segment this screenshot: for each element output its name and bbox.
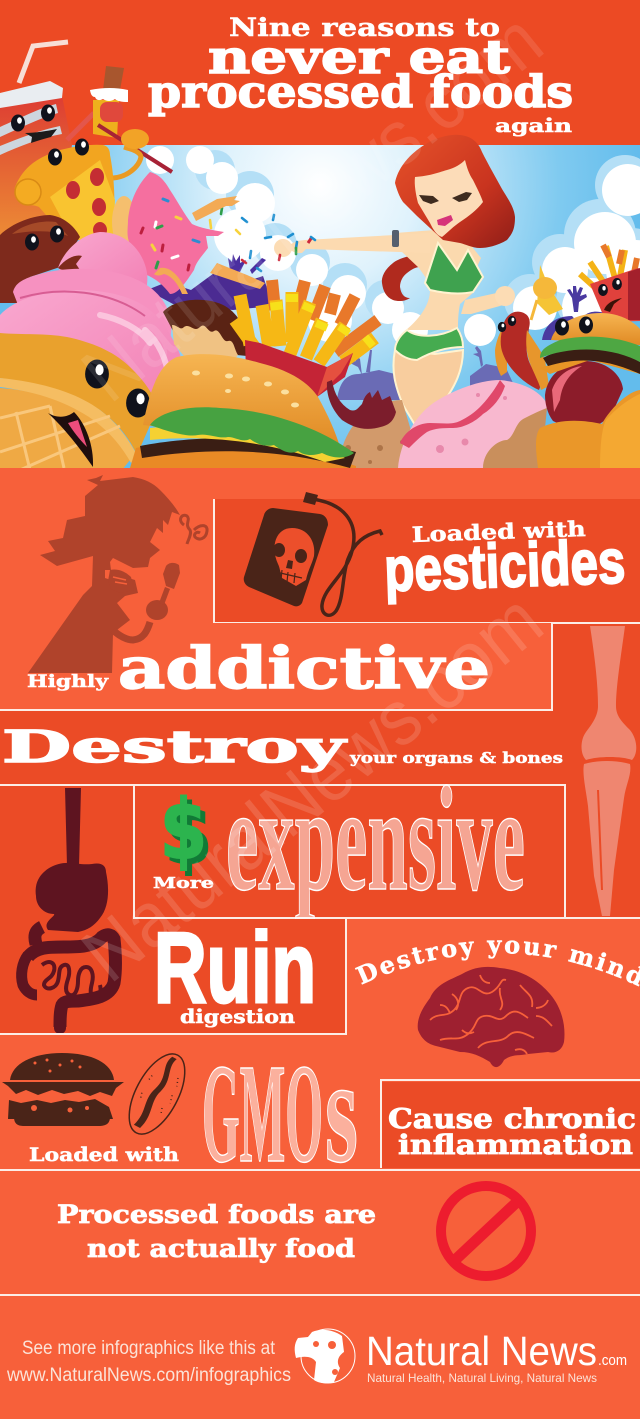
panel: pesticides (214, 492, 640, 623)
cup arm (67, 113, 94, 140)
text: cause chronic: Cause chronic (388, 1104, 636, 1135)
right side food (536, 361, 640, 468)
text: tagline: Natural Health, Natural Living, Natural News (367, 1371, 597, 1385)
hair (395, 135, 515, 248)
title: line 2: never eat (208, 30, 511, 84)
mouth (48, 412, 93, 467)
drink body (0, 96, 72, 235)
left dark column (0, 786, 134, 920)
skull (274, 528, 314, 586)
panel: chronic inflammation (381, 1080, 640, 1168)
icon: hot dog (118, 1045, 196, 1143)
popsicle stick (103, 66, 124, 90)
text: loaded with: Loaded with (411, 516, 586, 547)
soft-serve ice cream character (0, 232, 185, 470)
burger (130, 354, 356, 468)
text: .com: .com (598, 1352, 627, 1369)
fork (159, 587, 170, 605)
outstretched arm (291, 235, 402, 253)
panel: loaded with GMOs (0, 1028, 640, 1194)
title: line 3: processed foods (148, 67, 573, 118)
text: loaded with: Loaded with (29, 1144, 179, 1166)
purple hand and blob (542, 286, 605, 340)
small intestine (42, 962, 101, 997)
text: infographics url: www.NaturalNews.com/infographics (6, 1365, 291, 1386)
text: natural news logo: Natural News (366, 1328, 597, 1374)
cheese (150, 426, 345, 462)
mouth teeth (113, 577, 127, 584)
shorts (395, 328, 463, 360)
red hand (100, 102, 123, 122)
bottom bun and patty (130, 441, 356, 468)
pink iced donut (398, 380, 547, 468)
stomach (36, 863, 108, 932)
lettuce (150, 407, 354, 458)
cone rim (0, 333, 158, 455)
swirl middle (13, 269, 171, 350)
mustard bottle and hand (531, 265, 563, 320)
hero illustration: woman running from junk food (0, 42, 640, 470)
panel: more expensive (0, 756, 640, 922)
hot dog character (495, 312, 549, 390)
chocolate donut (163, 300, 247, 360)
clouds (146, 146, 640, 348)
small burger character (540, 313, 640, 374)
icon: digestive tract (22, 788, 116, 1034)
swirl fold (20, 292, 145, 316)
distant crowd (337, 346, 520, 400)
popsicle body (93, 100, 119, 138)
woman (274, 135, 515, 430)
text: more: More (153, 874, 214, 892)
waist (406, 290, 474, 330)
panel: addictive (0, 475, 552, 710)
title banner (0, 0, 640, 146)
footer (6, 1328, 627, 1386)
watermark: NaturalNews.com (65, 576, 558, 998)
icon: woman eating silhouette (28, 475, 207, 673)
pink donut character (112, 172, 265, 294)
highlight (100, 315, 169, 380)
text: see more infographics: See more infographics like this at (22, 1338, 276, 1359)
right dark column (553, 623, 640, 919)
mouth (25, 129, 57, 143)
text: destroy: Destroy (2, 722, 348, 773)
steam (181, 515, 207, 544)
panel: loaded with GMOs: GMO (202, 1034, 323, 1192)
legs (393, 350, 463, 430)
text: processed foods are: Processed foods are (57, 1200, 376, 1229)
eyes (419, 192, 472, 204)
green top (425, 243, 483, 293)
text: highly: Highly (27, 672, 109, 692)
cup character (0, 42, 72, 235)
sprinkles on donut (141, 199, 199, 270)
text: addictive: addictive (118, 635, 490, 702)
cloud shadows (195, 150, 640, 334)
french fries and box (235, 280, 378, 405)
esophagus (65, 788, 81, 866)
colon (28, 927, 116, 1027)
icon: prohibition sign (441, 1186, 531, 1276)
rim lower band (0, 378, 137, 463)
pepperoni (66, 168, 107, 238)
mouth (108, 569, 134, 593)
text: digestion: digestion (180, 1006, 295, 1028)
pizza character (14, 138, 115, 240)
chocolate character (0, 215, 80, 303)
wristband (392, 230, 399, 247)
near arm (461, 293, 502, 314)
icon: brain (418, 967, 564, 1067)
text: your organs and bones: your organs & bones (349, 749, 563, 767)
hand (146, 600, 168, 620)
text: GMOs: s (325, 1028, 358, 1194)
fries box (245, 340, 353, 405)
donut arms (192, 196, 265, 289)
lid (0, 81, 63, 108)
text: not actually food: not actually food (87, 1234, 355, 1263)
arm (113, 622, 150, 640)
panel: not actually food (0, 1171, 640, 1295)
lips (437, 215, 453, 226)
flying sprinkles (210, 208, 315, 271)
icon: leg bone (582, 626, 636, 916)
orange bun bottom (536, 390, 640, 468)
swirl tip (58, 232, 147, 296)
red sausage (545, 361, 623, 435)
text: inflammation: inflammation (398, 1130, 633, 1161)
popsicle and arm (67, 66, 172, 178)
text: destroy your mind: Destroy your mind (354, 940, 640, 986)
orange hand and arm (113, 147, 141, 178)
cup stripes (0, 104, 62, 155)
waffle (0, 388, 130, 470)
sky (0, 145, 640, 469)
icon: poison bottle with skull (244, 492, 382, 615)
eyes (11, 114, 25, 132)
icon: green dollar sign: $ (160, 783, 207, 878)
icing (90, 88, 128, 102)
title: line 1: Nine reasons to (229, 13, 500, 42)
text: ruin: Ruin (154, 912, 316, 1024)
fries character (580, 245, 640, 322)
panel: destroy organs and bones (0, 711, 563, 785)
icon: natural news globe logo (295, 1329, 355, 1383)
icon: hamburger (2, 1053, 124, 1126)
panel: destroy your mind (345, 919, 640, 1081)
panel: ruin digestion (0, 788, 345, 1034)
face (415, 160, 483, 237)
red stick (98, 125, 172, 172)
title: line 4: again (495, 115, 572, 137)
straw (19, 42, 68, 83)
purple crowd left (151, 274, 269, 310)
text: GMOs (202, 1028, 358, 1194)
red bracelet (308, 237, 312, 243)
shoulders (399, 230, 481, 278)
icon: green dollar sign: $ (165, 788, 212, 883)
brown bun with maroon claw (327, 380, 422, 468)
chocolate dollop (58, 256, 82, 270)
ponytail (382, 255, 420, 301)
